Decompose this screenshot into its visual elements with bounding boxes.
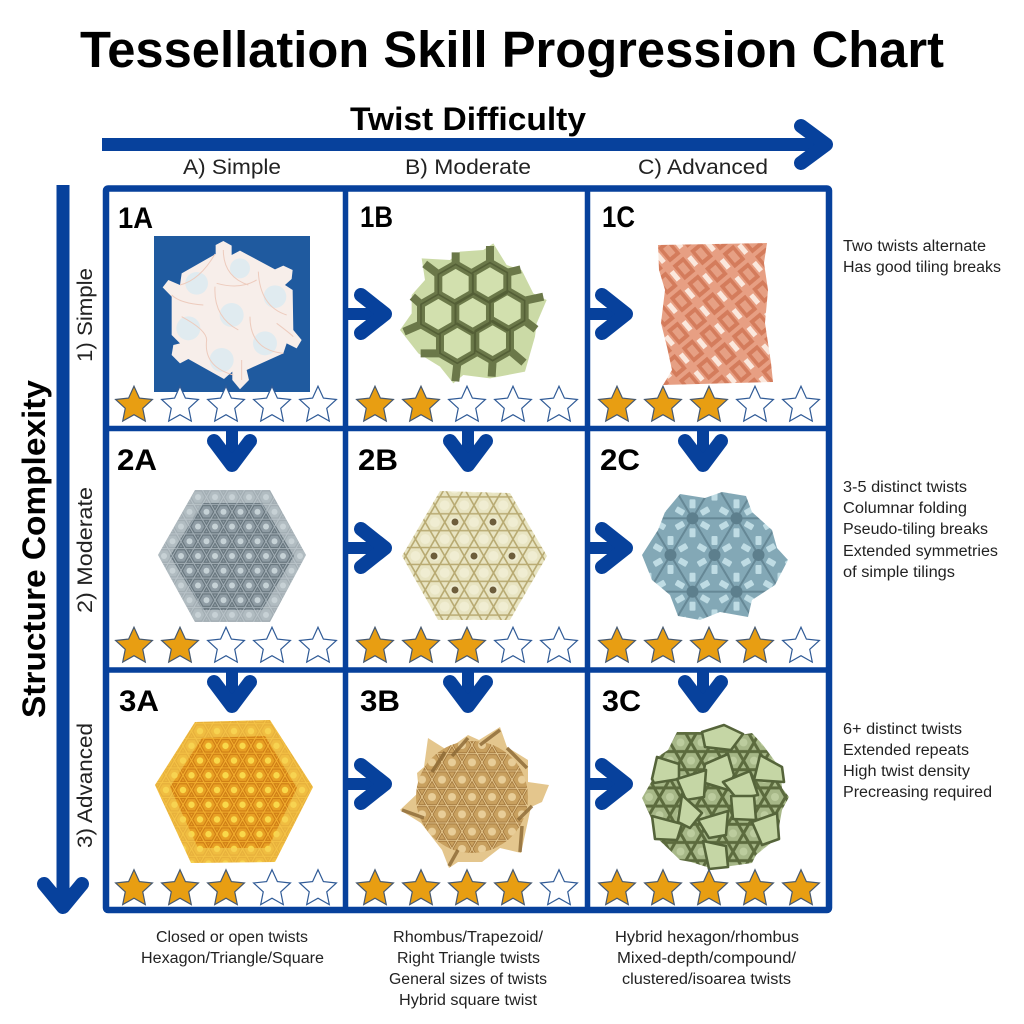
notes: row 1 <box>843 238 1001 276</box>
label 1B: 1B <box>360 201 393 234</box>
notes: row 1: Has good tiling breaks <box>843 259 1001 276</box>
panel: 2A <box>116 444 336 662</box>
photo: tan star tessellation <box>400 727 549 868</box>
photo: green hybrid tessellation <box>642 725 789 869</box>
arrow: structure complexity axis <box>44 185 82 907</box>
notes: row 2: of simple tilings <box>843 564 955 581</box>
arrows: vertical between rows <box>214 431 721 706</box>
rating: 5 of 5 stars <box>599 870 819 905</box>
panel: 1C <box>599 201 819 421</box>
title: Tessellation Skill Progression Chart <box>80 21 944 78</box>
heading: structure complexity: Structure Complexity <box>16 380 52 718</box>
label 2A: 2A <box>117 444 157 477</box>
column headers: B) Moderate <box>405 156 531 179</box>
notes: column A <box>141 929 324 967</box>
notes: row 2: Extended symmetries <box>843 543 998 560</box>
panel: 2B <box>357 444 577 662</box>
panel: 1B <box>357 201 577 421</box>
label 2C: 2C <box>600 444 640 477</box>
notes: column C <box>615 929 799 988</box>
notes: column C: Hybrid hexagon/rhombus <box>615 929 799 946</box>
photo: yellow hexagon tessellation <box>155 720 313 863</box>
notes: column B: Rhombus/Trapezoid/ <box>393 929 544 946</box>
notes: column B: General sizes of twists <box>389 971 547 988</box>
row headers <box>74 268 97 848</box>
rating: 3 of 5 stars <box>357 627 577 662</box>
notes: row 1: Two twists alternate <box>843 238 986 255</box>
notes: row 3: Precreasing required <box>843 784 992 801</box>
rating: 4 of 5 stars <box>599 627 819 662</box>
notes: column A: Hexagon/Triangle/Square <box>141 950 324 967</box>
photo: green honeycomb tessellation <box>400 243 547 383</box>
heading: twist difficulty: Twist Difficulty <box>350 101 586 137</box>
photo: cream hexagon tessellation <box>402 491 547 620</box>
notes: row 3 <box>843 721 992 801</box>
column headers: A) Simple <box>183 156 281 179</box>
column headers <box>183 156 768 179</box>
notes: column C: clustered/isoarea twists <box>622 971 791 988</box>
panel: 1A <box>116 202 336 421</box>
notes: column C: Mixed-depth/compound/ <box>617 950 797 967</box>
panel: 2C <box>599 444 819 662</box>
notes: column B: Hybrid square twist <box>399 992 538 1009</box>
row headers: 1) Simple <box>74 268 97 362</box>
rating: 3 of 5 stars <box>116 870 336 905</box>
grid frame <box>106 188 829 910</box>
photo: grey hexagon tessellation <box>158 490 306 622</box>
notes: row 3: Extended repeats <box>843 742 969 759</box>
row headers: 3) Advanced <box>74 723 97 848</box>
notes: row 2: Pseudo-tiling breaks <box>843 521 988 538</box>
label 3A: 3A <box>119 685 159 718</box>
notes: row 2 <box>843 479 998 581</box>
label 2B: 2B <box>358 444 398 477</box>
label 3B: 3B <box>360 685 400 718</box>
label 1A: 1A <box>118 202 153 235</box>
notes: row 2: 3-5 distinct twists <box>843 479 967 496</box>
notes: row 3: High twist density <box>843 763 970 780</box>
notes: column B: Right Triangle twists <box>397 950 540 967</box>
row headers: 2) Moderate <box>74 487 97 613</box>
panel: 3A <box>116 685 336 905</box>
photo: blue hexagon tessellation <box>642 492 788 620</box>
arrow: twist difficulty axis <box>102 126 826 163</box>
notes: column A: Closed or open twists <box>156 929 308 946</box>
photo: white hexagon tessellation on blue <box>154 236 310 392</box>
rating: 4 of 5 stars <box>357 870 577 905</box>
notes: row 2: Columnar folding <box>843 500 967 517</box>
arrows: horizontal between columns <box>348 295 626 803</box>
label 3C: 3C <box>602 685 641 718</box>
label 1C: 1C <box>602 201 635 234</box>
panel: 3B <box>357 685 577 905</box>
notes: column B <box>389 929 547 1009</box>
notes: row 3: 6+ distinct twists <box>843 721 962 738</box>
photo: orange woven rectangle tessellation <box>658 243 773 385</box>
panel: 3C <box>599 685 819 905</box>
rating: 3 of 5 stars <box>599 386 819 421</box>
rating: 1 of 5 stars <box>116 386 336 421</box>
rating: 2 of 5 stars <box>116 627 336 662</box>
column headers: C) Advanced <box>638 156 768 179</box>
rating: 2 of 5 stars <box>357 386 577 421</box>
